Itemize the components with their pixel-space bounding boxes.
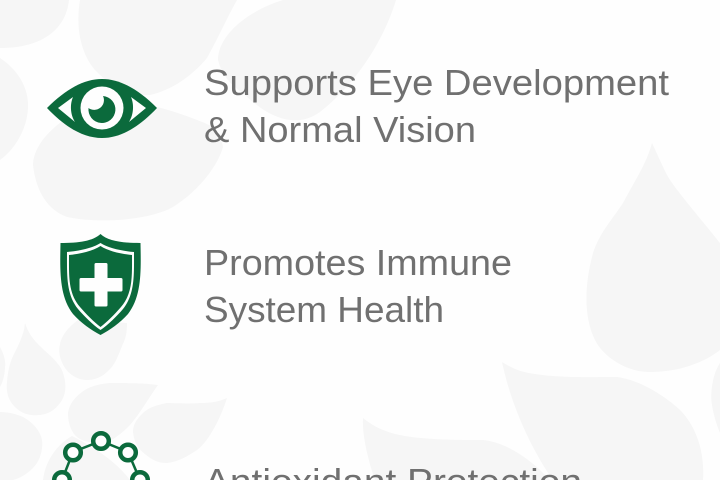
text: eye benefit [204,62,669,150]
text: immune benefit [204,242,512,330]
icon: antioxidant molecule ring [54,433,148,480]
text: immune benefit: Promotes Immune [204,242,512,283]
text: eye benefit: Supports Eye Development [204,62,669,103]
text: eye benefit: & Normal Vision [204,109,476,150]
icon: shield with cross [60,234,141,335]
text: immune benefit: System Health [204,289,444,330]
icon: eye [47,79,157,138]
